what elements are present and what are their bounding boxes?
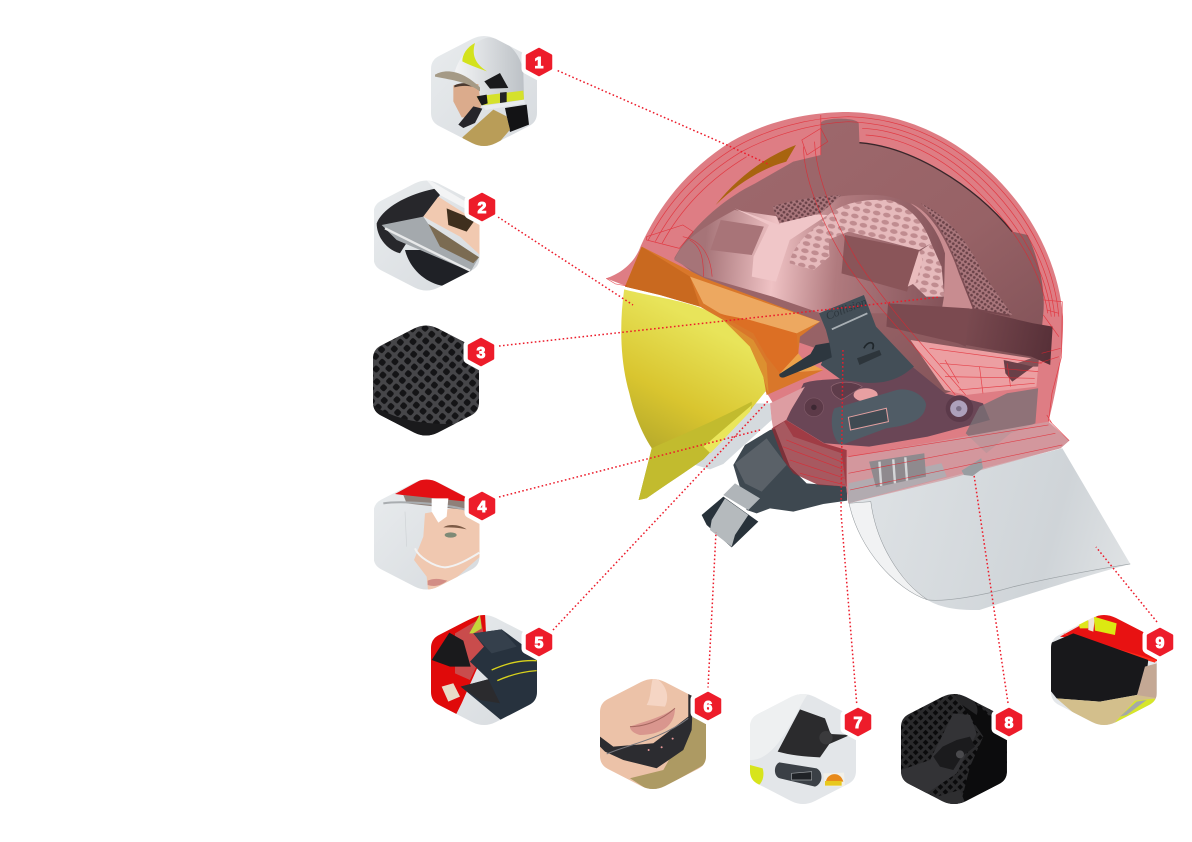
lower inner shell	[910, 340, 1038, 395]
badge 8	[997, 709, 1021, 735]
badge 2	[470, 194, 494, 220]
badge 3: 3	[477, 345, 486, 362]
visor knob	[962, 458, 983, 476]
photo 5: gloved hand on helmet clip	[430, 613, 538, 729]
badge 4: 4	[478, 499, 487, 516]
leader lines	[498, 69, 1157, 707]
bracket with logo	[779, 295, 914, 383]
photo 1: firefighter in helmet	[431, 33, 537, 153]
badge 9	[1148, 629, 1172, 655]
lower shell band	[845, 422, 1069, 503]
rear mechanism	[966, 388, 1038, 453]
red section at chin	[772, 420, 847, 487]
inner liner	[674, 195, 1012, 347]
number badges	[469, 49, 1172, 735]
photo 4: face with eye shield	[374, 477, 480, 593]
badge 9: 9	[1156, 635, 1165, 652]
leader line 5	[553, 400, 769, 630]
photo 9: neck curtain on firefighter	[1050, 612, 1158, 730]
badge 4	[470, 493, 494, 519]
badge 1: 1	[535, 55, 544, 72]
photo 7: helmet side with bracket and clip	[750, 692, 856, 808]
shell interior	[674, 119, 1044, 393]
leader line 4	[499, 430, 760, 497]
photo 2: gloved hands adjusting visor	[374, 177, 480, 294]
lower clip	[832, 389, 926, 445]
badge 8: 8	[1005, 715, 1014, 732]
side plate	[786, 367, 990, 447]
leader line 8	[974, 475, 1008, 703]
leader line 1	[554, 69, 770, 165]
eye shield and chin strap	[690, 403, 847, 547]
leader line 3	[499, 297, 940, 346]
badge 6: 6	[704, 699, 713, 716]
badge 5	[527, 629, 551, 655]
head strap	[886, 303, 969, 345]
badge 1	[527, 49, 551, 75]
neck curtain	[848, 448, 1130, 610]
bracket with logo: Collision	[824, 296, 869, 323]
photo 6: chin cup under mouth	[600, 677, 707, 793]
helmet shell and interior	[606, 112, 1069, 503]
badge 3	[469, 339, 493, 365]
wireframe lines of shell	[606, 115, 1069, 490]
badge 2: 2	[478, 200, 487, 217]
pink wedge behind shield	[770, 387, 805, 429]
leader line 6	[708, 532, 716, 688]
bracket, clip, pivot and lower band	[779, 295, 1069, 503]
photo panels	[373, 33, 1158, 808]
shield slot seen through shell	[716, 145, 796, 205]
leader line 9	[1096, 547, 1157, 622]
yellow face shield	[621, 289, 767, 500]
red shell	[606, 112, 1069, 503]
ear pivot	[946, 395, 973, 422]
photo 8: black ratchet knob	[901, 692, 1007, 808]
orange visor band	[625, 247, 823, 395]
badge 5: 5	[535, 635, 544, 652]
leader line 2	[498, 217, 633, 305]
badge 7: 7	[854, 715, 863, 732]
badge 7	[846, 709, 870, 735]
helmet cutaway illustration	[606, 112, 1130, 610]
leader line 7	[841, 348, 857, 707]
photo 3: black mesh fabric	[373, 323, 479, 440]
badge 6	[696, 693, 720, 719]
